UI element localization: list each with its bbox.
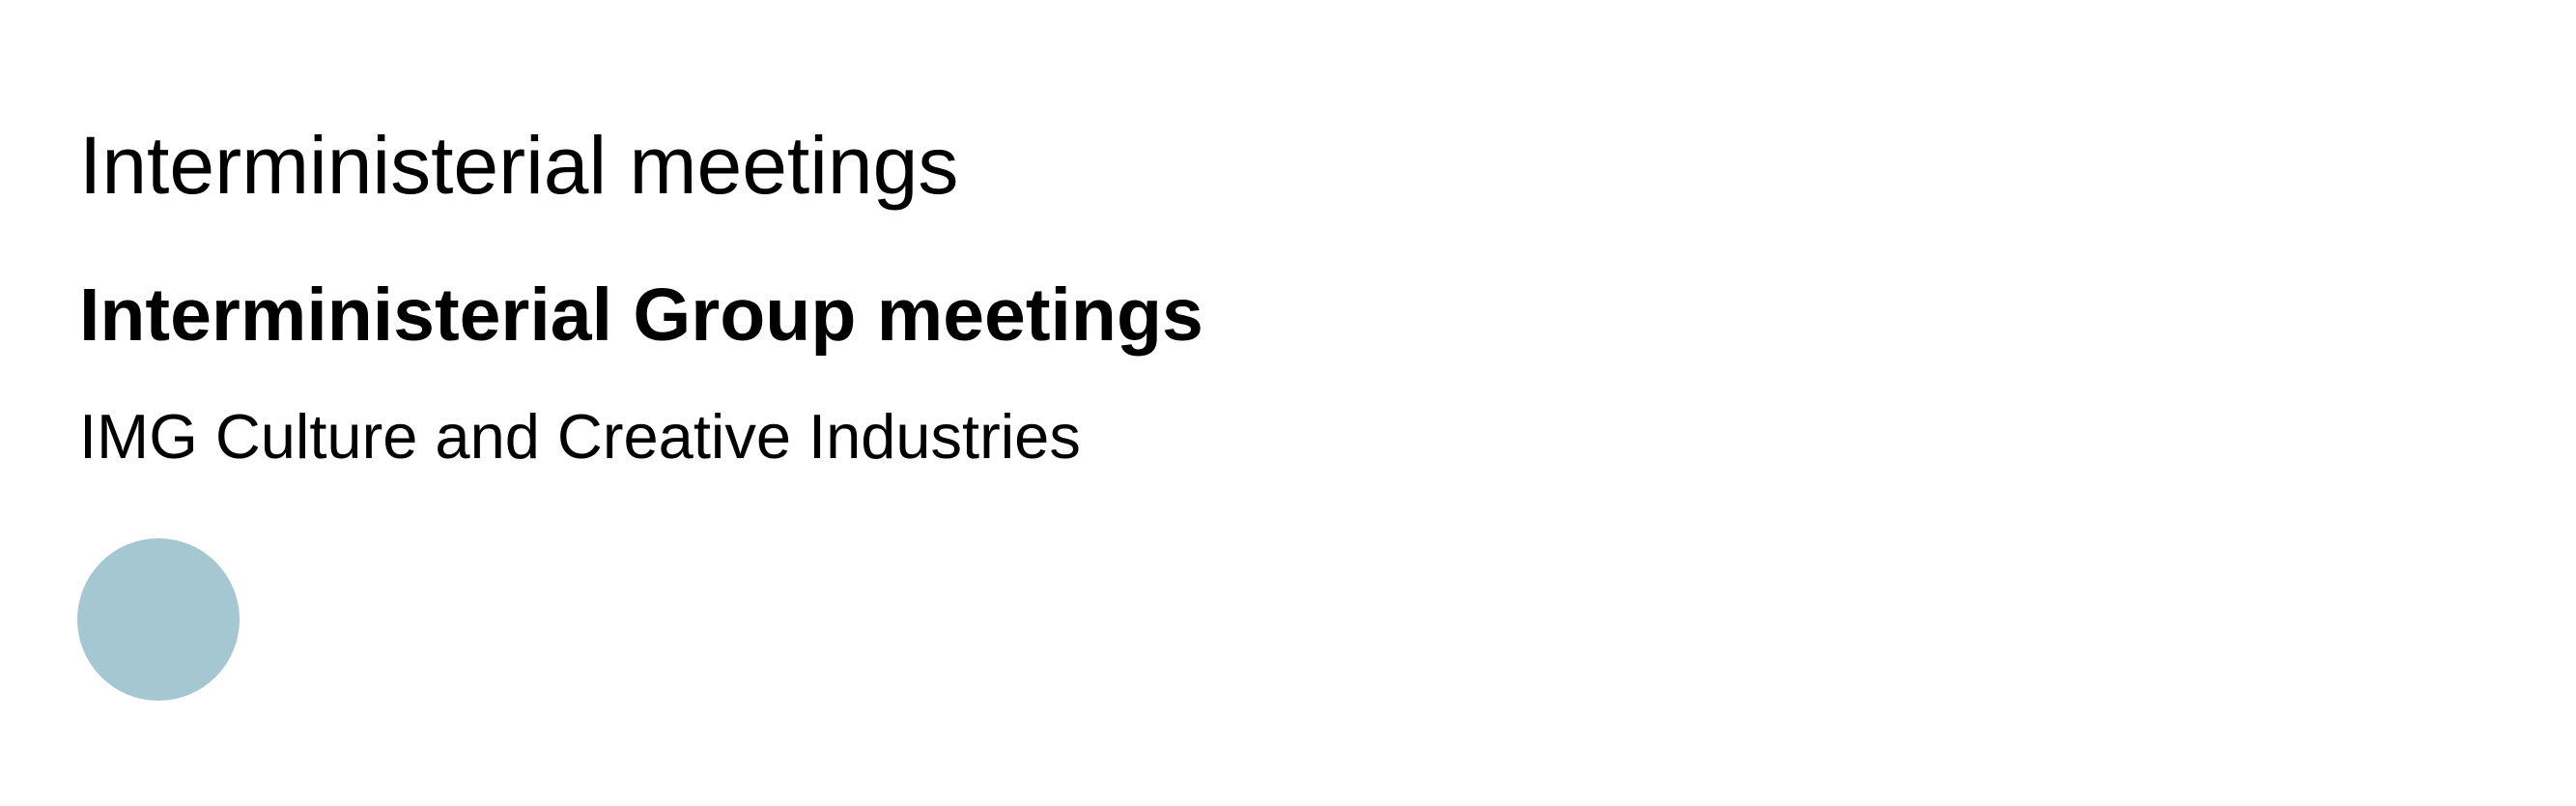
icon: blue circle marker xyxy=(77,538,240,701)
title: Interministerial meetings xyxy=(79,120,958,211)
subheading: Interministerial Group meetings xyxy=(79,273,1203,357)
group name text: IMG Culture and Creative Industries xyxy=(79,401,1081,472)
